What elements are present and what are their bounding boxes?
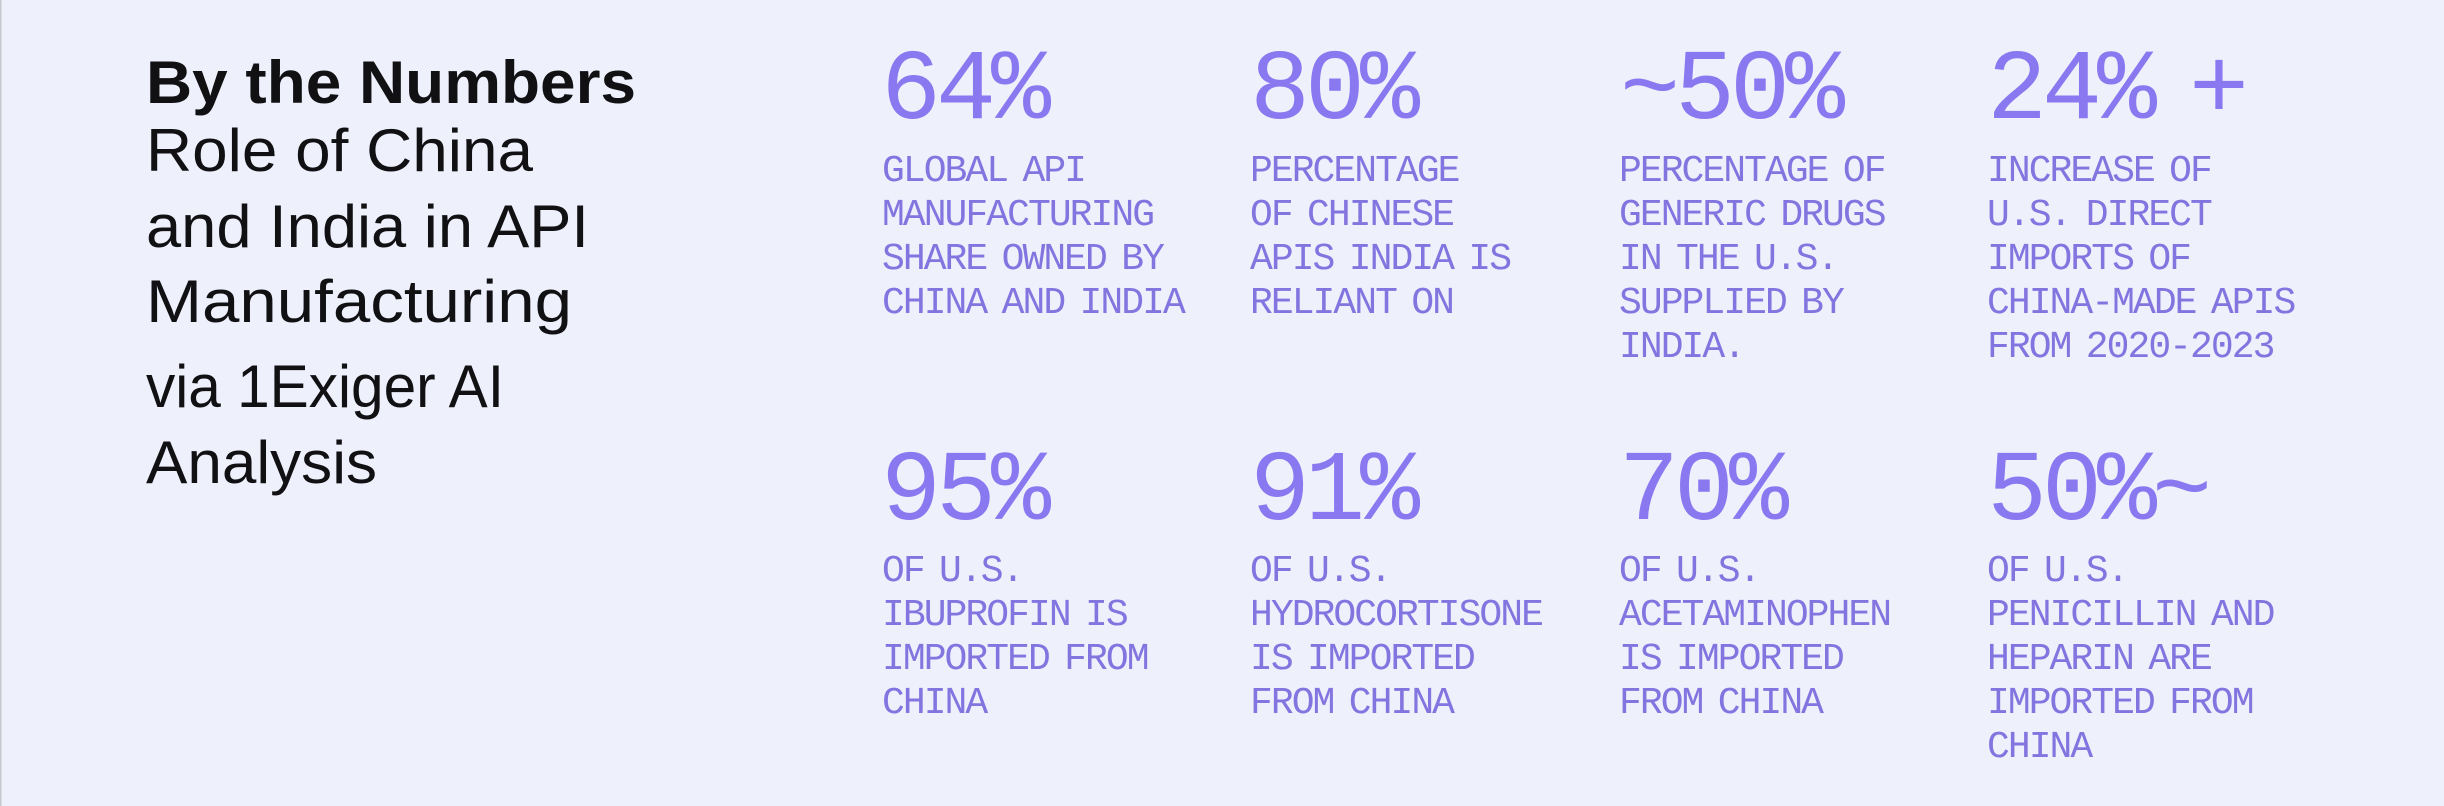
stat: 70% acetaminophen: FROM CHINA	[1619, 682, 1824, 725]
stat: 50%~ penicillin and heparin: PENICILLIN AND	[1987, 594, 2274, 637]
stat: 24% + direct imports: CHINA-MADE APIS	[1987, 282, 2294, 325]
stat: ~50% generic drugs: SUPPLIED BY	[1619, 282, 1845, 325]
stat: 50%~ penicillin and heparin	[1987, 437, 2274, 769]
stat: 95% ibuprofin: 95%	[881, 437, 1052, 550]
stat: 70% acetaminophen	[1619, 437, 1890, 725]
stat: ~50% generic drugs: GENERIC DRUGS	[1619, 194, 1885, 237]
stat: 64% global API share: GLOBAL API	[882, 150, 1085, 193]
stat: 95% ibuprofin: IMPORTED FROM	[882, 638, 1148, 681]
stat: 91% hydrocortisone: HYDROCORTISONE	[1250, 594, 1542, 637]
stat: 70% acetaminophen: OF U.S.	[1619, 550, 1759, 593]
stat: 95% ibuprofin	[881, 437, 1148, 725]
stat: 80% Chinese APIs: OF CHINESE	[1250, 194, 1453, 237]
stat: 64% global API share	[881, 36, 1186, 325]
subtitle: Role of China	[146, 117, 534, 184]
stat: 24% + direct imports: FROM 2020-2023	[1987, 326, 2274, 369]
stat: ~50% generic drugs: INDIA.	[1619, 326, 1744, 369]
stat: 64% global API share: CHINA AND INDIA	[882, 282, 1186, 325]
stat: ~50% generic drugs: ~50%	[1620, 36, 1846, 149]
stat: 95% ibuprofin: CHINA	[882, 682, 988, 725]
stat: 95% ibuprofin: OF U.S.	[882, 550, 1022, 593]
stat: 70% acetaminophen: ACETAMINOPHEN	[1619, 594, 1890, 637]
stat: 80% Chinese APIs: APIS INDIA IS	[1250, 238, 1510, 281]
stat: 91% hydrocortisone: IS IMPORTED	[1250, 638, 1474, 681]
stat: 50%~ penicillin and heparin: IMPORTED FROM	[1987, 682, 2253, 725]
stat: 80% Chinese APIs: 80%	[1250, 36, 1421, 149]
heading: By the Numbers	[146, 49, 636, 116]
stat: 64% global API share: MANUFACTURING	[882, 194, 1153, 237]
stat: 95% ibuprofin: IBUPROFIN IS	[882, 594, 1127, 637]
stat: 91% hydrocortisone: OF U.S.	[1250, 550, 1390, 593]
stat: 64% global API share: SHARE OWNED BY	[882, 238, 1165, 281]
stat: ~50% generic drugs: IN THE U.S.	[1619, 238, 1837, 281]
subtitle: via 1Exiger AI	[146, 353, 504, 420]
stat: ~50% generic drugs: PERCENTAGE OF	[1619, 150, 1885, 193]
stat: 50%~ penicillin and heparin: OF U.S.	[1987, 550, 2127, 593]
stat: 64% global API share: 64%	[881, 36, 1052, 149]
stat: 24% + direct imports: U.S. DIRECT	[1987, 194, 2212, 237]
stat: 80% Chinese APIs: RELIANT ON	[1250, 282, 1453, 325]
stat: 70% acetaminophen: IS IMPORTED	[1619, 638, 1843, 681]
subtitle	[146, 117, 589, 496]
stat: 50%~ penicillin and heparin: 50%~	[1987, 437, 2207, 550]
subtitle: Manufacturing	[146, 268, 572, 335]
subtitle: Analysis	[146, 429, 377, 496]
stat: 50%~ penicillin and heparin: HEPARIN ARE	[1987, 638, 2211, 681]
title block	[146, 49, 636, 496]
stat: 91% hydrocortisone	[1250, 437, 1542, 725]
subtitle: and India in API	[146, 193, 589, 260]
stat: ~50% generic drugs	[1619, 36, 1885, 369]
stat: 80% Chinese APIs: PERCENTAGE	[1250, 150, 1459, 193]
stat: 24% + direct imports: INCREASE OF	[1987, 150, 2211, 193]
stat: 91% hydrocortisone: FROM CHINA	[1250, 682, 1455, 725]
stat: 70% acetaminophen: 70%	[1619, 437, 1790, 550]
stat: 80% Chinese APIs	[1250, 36, 1510, 325]
stat: 24% + direct imports: 24% +	[1987, 36, 2244, 149]
stat: 91% hydrocortisone: 91%	[1250, 437, 1421, 550]
stat: 50%~ penicillin and heparin: CHINA	[1987, 726, 2093, 769]
stat: 24% + direct imports: IMPORTS OF	[1987, 238, 2190, 281]
stat: 24% + direct imports	[1987, 36, 2294, 369]
